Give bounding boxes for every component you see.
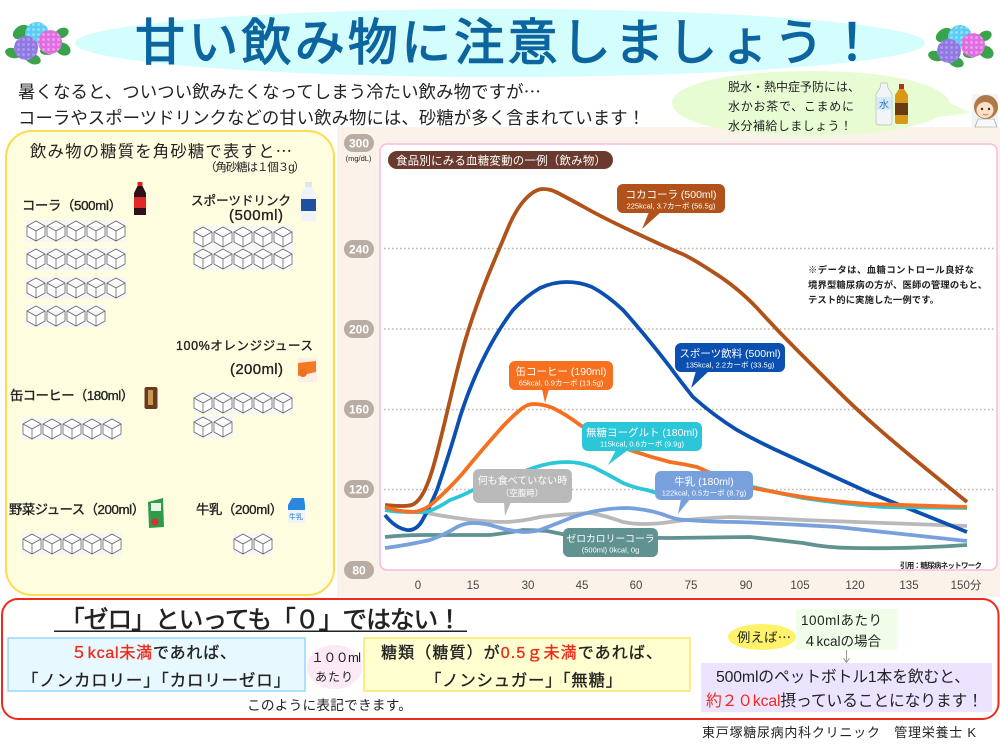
line: milk: [385, 508, 967, 548]
title ellipse background: [75, 9, 925, 77]
icon: nurse: [972, 94, 998, 127]
callout: hydration advice: 水分補給しましょう！: [728, 119, 852, 133]
x axis labels: 60: [630, 580, 642, 592]
box: non-sugar: [364, 638, 690, 691]
y axis labels: 200: [349, 322, 369, 336]
line: coca cola: [385, 189, 967, 506]
orange juice section: 100%オレンジジュース: [176, 339, 313, 353]
y axis labels: (mg/dL): [346, 154, 372, 163]
cola section: [22, 198, 126, 327]
x axis labels: 105: [790, 580, 810, 592]
icon: coffee can: [144, 387, 158, 409]
label: yogurt: [582, 422, 702, 465]
line: sports drink: [385, 282, 967, 532]
example badge: 例えば…: [737, 627, 791, 646]
footer credit: 東戸塚糖尿病内科クリニック 管理栄養士 K: [702, 725, 976, 740]
y axis labels: 300: [349, 136, 369, 150]
callout: hydration advice: 水かお茶で、こまめに: [728, 100, 854, 114]
label: yogurt: 無糖ヨーグルト (180ml): [586, 426, 698, 439]
label: yogurt: 115kcal, 0.6カーボ (9.9g): [600, 440, 685, 448]
y axis labels: 160: [349, 402, 369, 416]
vegetable juice section: [9, 502, 145, 555]
label: fasting: （空腹時）: [501, 488, 543, 498]
x axis labels: 120: [845, 580, 865, 592]
sports drink section: (500ml): [229, 207, 283, 224]
example result: 約２０kcal摂っていることになります！: [706, 692, 983, 710]
icon: milk carton: 牛乳: [289, 512, 303, 521]
label: sports drink: スポーツ飲料 (500ml): [679, 347, 781, 360]
milk section: 牛乳（200ml）: [196, 502, 283, 517]
y axis labels: 120: [349, 482, 369, 496]
panel heading: 飲み物の糖質を角砂糖で表すと…: [30, 138, 292, 162]
label: zero calorie cola: (500ml) 0kcal, 0g: [582, 546, 639, 554]
x axis labels: 75: [685, 580, 697, 592]
label: fasting: [473, 469, 572, 516]
icon: hydrangea left: [4, 22, 73, 66]
label: fasting: 何も食べていない時: [478, 474, 567, 487]
canned coffee section: 缶コーヒー（180ml）: [10, 388, 134, 403]
line: yogurt: [385, 462, 967, 512]
chart citation: 引用：糖尿病ネットワーク: [900, 560, 982, 570]
line: canned coffee: [385, 404, 967, 512]
example condition: 100mlあたり: [801, 613, 882, 628]
label: milk: [655, 471, 753, 514]
x axis labels: 0: [415, 580, 421, 592]
chart note: 境界型糖尿病の方が、医師の管理のもと、: [808, 279, 987, 290]
note text: このように表記できます。: [247, 698, 412, 713]
label: zero calorie cola: ゼロカロリーコーラ: [566, 533, 655, 545]
example result: 500mlのペットボトル1本を飲むと、: [716, 668, 970, 686]
per 100ml badge: １００ml: [311, 650, 361, 665]
orange juice section: [176, 339, 313, 438]
intro text: [18, 79, 645, 128]
box: non-calorie: [8, 638, 305, 691]
label: coca cola: コカコーラ (500ml): [625, 189, 717, 201]
label: canned coffee: 65kcal, 0.9カーボ (13.5g): [519, 378, 604, 388]
arrow: [844, 650, 850, 662]
label: zero calorie cola: [563, 528, 658, 557]
canned coffee section: [10, 388, 134, 440]
chart note: [808, 264, 987, 305]
box: non-calorie: ５kcal未満であれば、: [71, 644, 236, 662]
label: milk: 122kcal, 0.5カーボ (8.7g): [662, 488, 747, 498]
per 100ml badge: あたり: [315, 670, 353, 684]
example condition: ４kcalの場合: [803, 634, 882, 649]
icon: water bottle: [876, 83, 892, 125]
icon: orange juice carton: [298, 358, 317, 382]
cola section: コーラ（500ml）: [22, 198, 122, 213]
chart note: テスト的に実施した一例です。: [808, 294, 939, 305]
box: non-calorie: 「ノンカロリー」「カロリーゼロ」: [22, 672, 290, 690]
title: 甘い飲み物に注意しましょう！: [135, 15, 877, 71]
label: coca cola: 225kcal, 3.7カーボ (56.5g): [627, 202, 716, 210]
chart note: ※データは、血糖コントロール良好な: [808, 264, 974, 275]
x axis labels: [415, 579, 982, 592]
icon: cola bottle: [134, 182, 146, 215]
callout: hydration advice: 脱水・熱中症予防には、: [728, 79, 860, 94]
box: non-sugar: 糖類（糖質）が0.5ｇ未満であれば、: [381, 644, 662, 662]
icon: hydrangea right: [927, 25, 996, 69]
panel: blood sugar chart: [344, 134, 997, 592]
y axis labels: [344, 134, 374, 579]
icon: vegetable juice carton: [148, 498, 164, 528]
sports drink section: [191, 194, 293, 270]
panel: sugar cubes: [6, 131, 334, 595]
y axis labels: 80: [352, 564, 366, 578]
callout: hydration advice: [672, 71, 971, 136]
chart title: [388, 151, 613, 169]
icon: water bottle: 水: [879, 99, 889, 111]
intro text: 暑くなると、ついつい飲みたくなってしまう冷たい飲み物ですが…: [18, 79, 541, 104]
x axis labels: 135: [899, 580, 919, 592]
panel note: （角砂糖は１個３g）: [205, 161, 305, 174]
chart background: [337, 127, 1000, 597]
y axis labels: 240: [349, 242, 369, 256]
orange juice section: (200ml): [230, 361, 283, 378]
label: sports drink: [675, 343, 785, 388]
x axis labels: 90: [740, 580, 752, 592]
intro text: コーラやスポーツドリンクなどの甘い飲み物には、砂糖が多く含まれています！: [18, 108, 645, 128]
label: canned coffee: [509, 361, 613, 403]
line: zero calorie cola: [385, 530, 967, 548]
panel: zero is not 0: [2, 599, 998, 719]
line: fasting: [385, 510, 967, 526]
example badge: [728, 624, 796, 650]
x axis labels: 45: [576, 580, 588, 592]
heading: 「ゼロ」といっても「０」ではない！: [60, 606, 462, 634]
sports drink section: スポーツドリンク: [191, 194, 291, 208]
icon: tea bottle: [895, 84, 908, 124]
label: canned coffee: 缶コーヒー (190ml): [515, 365, 607, 378]
example condition: [796, 609, 897, 650]
vegetable juice section: 野菜ジュース（200ml）: [9, 502, 145, 517]
example result: [701, 663, 992, 712]
label: coca cola: [617, 184, 725, 229]
x axis labels: 30: [522, 580, 534, 592]
label: milk: 牛乳 (180ml): [674, 475, 734, 488]
icon: sports drink bottle: [301, 182, 316, 221]
icon: milk carton: [288, 498, 305, 523]
box: non-sugar: 「ノンシュガー」「無糖」: [425, 672, 622, 690]
label: sports drink: 135kcal, 2.2カーボ (33.5g): [686, 360, 775, 370]
chart title: 食品別にみる血糖変動の一例（飲み物）: [396, 154, 606, 168]
x axis labels: 15: [467, 580, 479, 592]
milk section: [196, 502, 283, 555]
x axis labels: 150分: [951, 579, 982, 592]
per 100ml badge: [307, 645, 362, 689]
